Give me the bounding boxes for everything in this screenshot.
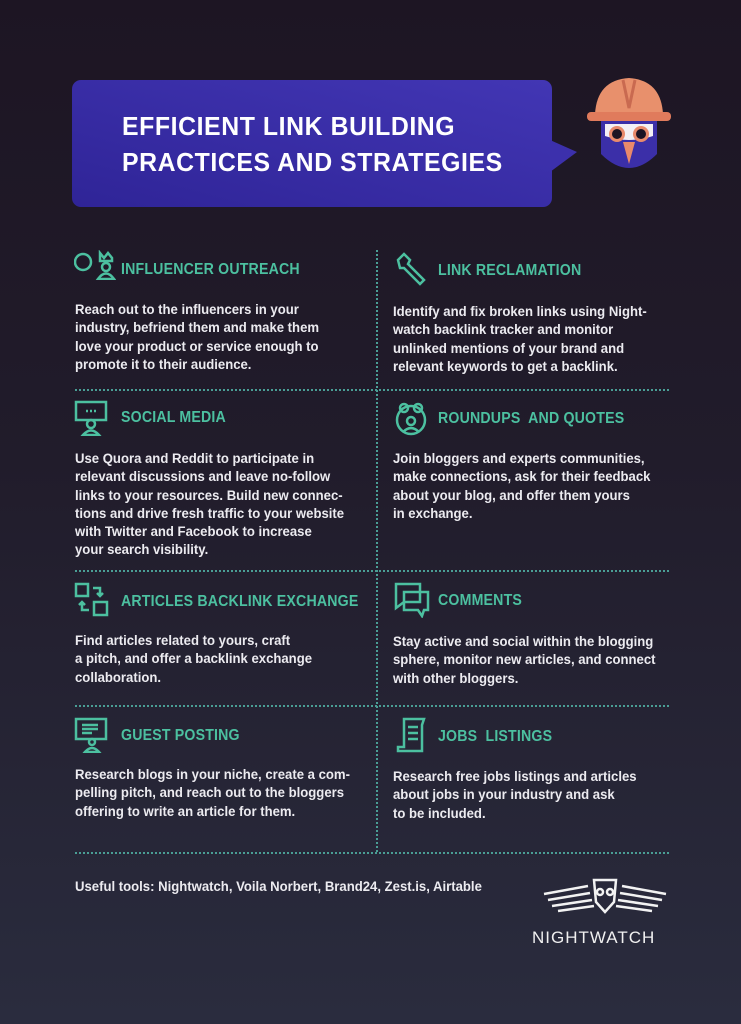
- text: links to your resources. Build new connec-: [75, 488, 343, 503]
- panel: influencer outreach: [74, 250, 319, 372]
- title text: [122, 111, 503, 177]
- text: [393, 634, 656, 686]
- panel: link reclamation: [393, 252, 647, 374]
- text: with other bloggers.: [393, 671, 518, 686]
- icon: influencer: [74, 250, 116, 280]
- heading: GUEST POSTING: [121, 727, 240, 744]
- icon: comments: [394, 582, 430, 618]
- heading: INFLUENCER OUTREACH: [121, 261, 300, 278]
- footer tools text: Useful tools: Nightwatch, Voila Norbert, Brand24, Zest.is, Airtable: [75, 879, 482, 894]
- text: unlinked mentions of your brand and: [393, 341, 624, 356]
- icon: owl mascot: [587, 78, 671, 168]
- text: make connections, ask for their feedback: [393, 469, 650, 484]
- logo: nightwatch: [532, 878, 666, 947]
- logo text: NIGHTWATCH: [532, 928, 655, 947]
- heading: JOBS LISTINGS: [438, 728, 552, 745]
- title banner: [72, 80, 577, 207]
- icon: social: [74, 400, 108, 436]
- text: [393, 769, 637, 821]
- text: Join bloggers and experts communities,: [393, 451, 645, 466]
- vertical divider: [376, 250, 378, 852]
- panel: roundups and quotes: [393, 402, 650, 521]
- heading: LINK RECLAMATION: [438, 262, 581, 279]
- text: [75, 302, 319, 372]
- text: [75, 633, 312, 685]
- text: relevant keywords to get a backlink.: [393, 359, 618, 374]
- text: promote it to their audience.: [75, 357, 251, 372]
- text: Stay active and social within the blogging: [393, 634, 653, 649]
- title text: EFFICIENT LINK BUILDING: [122, 111, 455, 141]
- icon: wrench: [396, 252, 426, 286]
- icon: scroll: [396, 718, 426, 752]
- text: about your blog, and offer them yours: [393, 488, 630, 503]
- heading: ROUNDUPS AND QUOTES: [438, 410, 624, 427]
- text: pelling pitch, and reach out to the bloggers: [75, 785, 344, 800]
- title text: PRACTICES AND STRATEGIES: [122, 147, 503, 177]
- panel: guest posting: [74, 718, 350, 819]
- text: sphere, monitor new articles, and connect: [393, 652, 656, 667]
- icon: guest posting: [74, 718, 108, 753]
- text: collaboration.: [75, 670, 161, 685]
- text: your search visibility.: [75, 542, 208, 557]
- text: Use Quora and Reddit to participate in: [75, 451, 314, 466]
- heading: COMMENTS: [438, 592, 522, 609]
- text: Identify and fix broken links using Night-: [393, 304, 647, 319]
- text: Research free jobs listings and articles: [393, 769, 637, 784]
- text: [75, 451, 344, 557]
- text: a pitch, and offer a backlink exchange: [75, 651, 312, 666]
- text: watch backlink tracker and monitor: [393, 322, 613, 337]
- text: Research blogs in your niche, create a com-: [75, 767, 350, 782]
- text: Find articles related to yours, craft: [75, 633, 290, 648]
- icon: group: [396, 402, 426, 436]
- text: to be included.: [393, 806, 486, 821]
- text: [393, 304, 647, 374]
- text: [75, 767, 350, 819]
- text: offering to write an article for them.: [75, 804, 295, 819]
- panel: jobs listings: [393, 718, 637, 821]
- text: in exchange.: [393, 506, 473, 521]
- text: relevant discussions and leave no-follow: [75, 469, 330, 484]
- text: about jobs in your industry and ask: [393, 787, 615, 802]
- text: with Twitter and Facebook to increase: [75, 524, 312, 539]
- icon: exchange: [74, 582, 108, 616]
- text: tions and drive fresh traffic to your website: [75, 506, 344, 521]
- text: Reach out to the influencers in your: [75, 302, 299, 317]
- heading: SOCIAL MEDIA: [121, 409, 226, 426]
- heading: ARTICLES BACKLINK EXCHANGE: [121, 593, 358, 610]
- panel: social media: [74, 400, 344, 557]
- panel: articles backlink exchange: [74, 582, 358, 685]
- text: [393, 451, 650, 521]
- text: industry, befriend them and make them: [75, 320, 319, 335]
- panel: comments: [393, 582, 656, 686]
- text: love your product or service enough to: [75, 339, 319, 354]
